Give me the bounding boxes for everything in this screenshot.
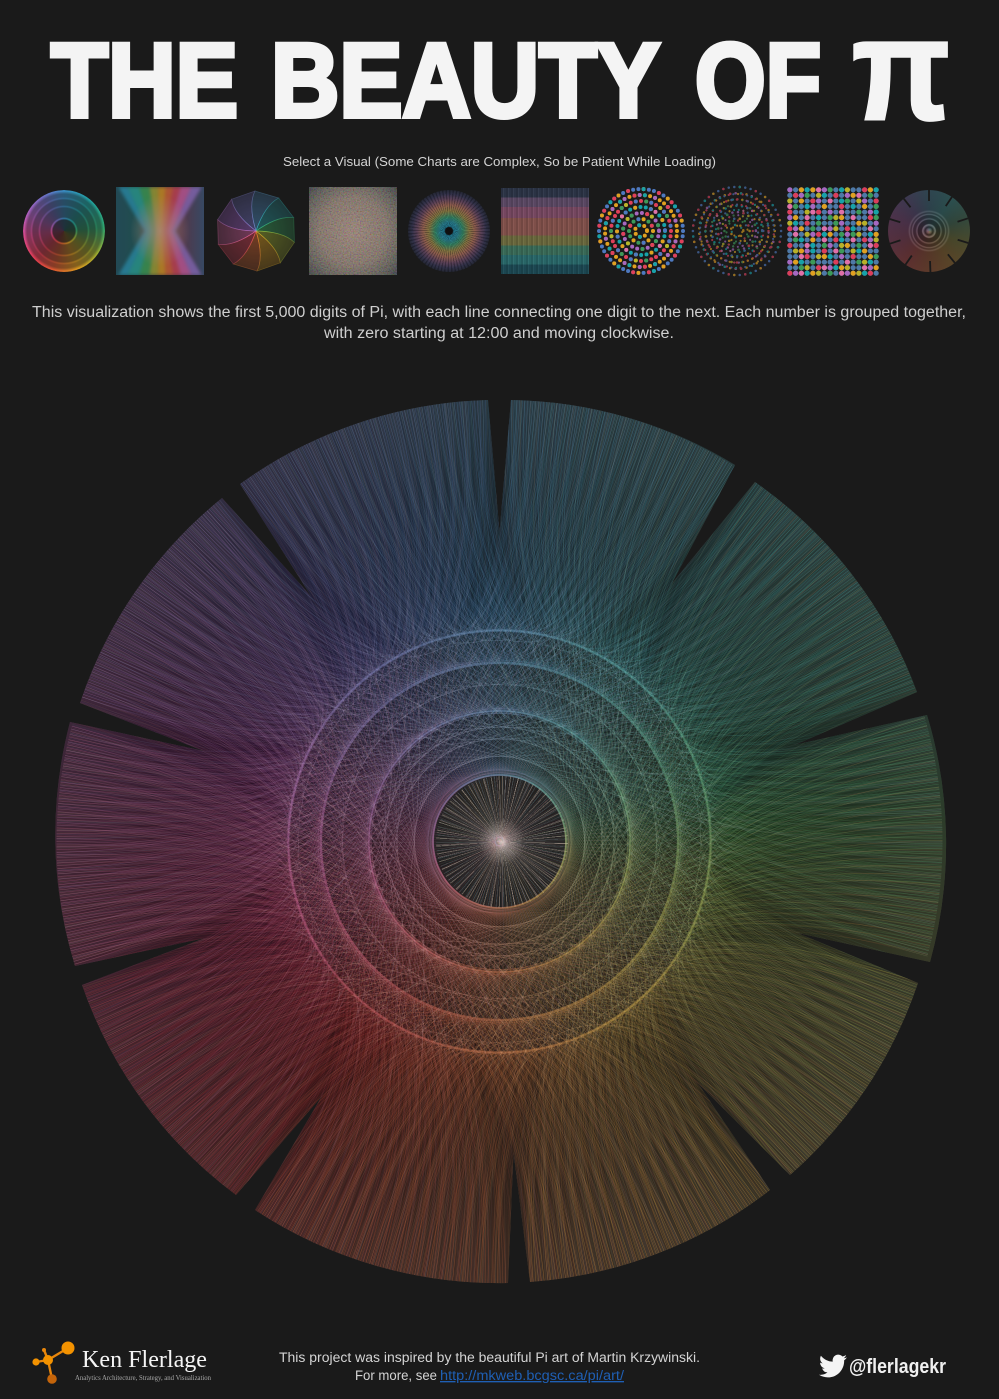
logo wordmark: Ken Flerlage bbox=[82, 1347, 207, 1373]
logo icon bbox=[32, 1342, 74, 1384]
title: THE bbox=[51, 22, 238, 140]
footer: twitter handle bbox=[819, 1354, 946, 1378]
thumbnail 5: radial eye bbox=[408, 190, 490, 272]
footer: credit text: http://mkweb.bcgsc.ca/pi/art/ bbox=[440, 1368, 624, 1383]
footer: Ken Flerlage logo bbox=[32, 1342, 211, 1384]
hourglass colour bands bbox=[118, 187, 202, 275]
mini wheel gaps bbox=[890, 190, 968, 272]
wheel base: dim rim segments bbox=[55, 400, 946, 1284]
thumbnail row: visual selector bbox=[23, 186, 970, 276]
thumbnail 2: rainbow hourglass rectangle bbox=[116, 187, 204, 275]
title: OF bbox=[695, 22, 821, 140]
logo wordmark: Analytics Architecture, Strategy, and Visualization bbox=[75, 1374, 211, 1382]
muted wheel body bbox=[55, 400, 946, 1284]
description text bbox=[32, 304, 966, 342]
footer: credit text: This project was inspired by the beautiful Pi art of Martin Krzywinski. bbox=[279, 1350, 700, 1365]
subtitle: select a visual: Select a Visual (Some Charts are Complex, So be Patient While Loading) bbox=[283, 154, 716, 169]
logo wordmark bbox=[75, 1347, 211, 1382]
title bbox=[50, 20, 950, 140]
scattered pale chords bbox=[72, 404, 924, 1280]
thumbnail 7: spiral of coloured dots bbox=[597, 187, 685, 275]
thumbnail 1: straight chord rings bbox=[23, 190, 105, 272]
footer: credit text bbox=[279, 1350, 700, 1383]
position hue overlay bbox=[55, 400, 946, 1283]
mini wheel disc bbox=[888, 190, 970, 272]
thumbnail 9: dot grid bbox=[787, 187, 879, 276]
hourglass centre haze bbox=[116, 187, 204, 275]
chord lines bbox=[56, 400, 942, 1284]
thumbnail 10: mini chord wheel bbox=[888, 190, 970, 272]
thumbnail 6: horizontal colour bands bbox=[501, 188, 589, 274]
thumbnail 3: pinwheel star bbox=[217, 190, 295, 272]
description text: This visualization shows the first 5,000 digits of Pi, with each line connecting one digit to the next. Each number is grouped together, bbox=[32, 304, 966, 321]
footer: credit text: For more, see bbox=[355, 1368, 437, 1383]
centre burst inside the inner ring bbox=[436, 776, 568, 908]
description text: with zero starting at 12:00 and moving clockwise. bbox=[323, 325, 674, 342]
icon: twitter bird bbox=[819, 1354, 847, 1378]
thumbnail 8: spiral of digits bbox=[692, 186, 782, 276]
ring highlights bbox=[287, 629, 712, 1054]
main chart: chord wheel of digits bbox=[55, 400, 946, 1284]
title: BEAUTY bbox=[271, 22, 660, 140]
thumbnail 4: noisy square bbox=[309, 187, 397, 275]
